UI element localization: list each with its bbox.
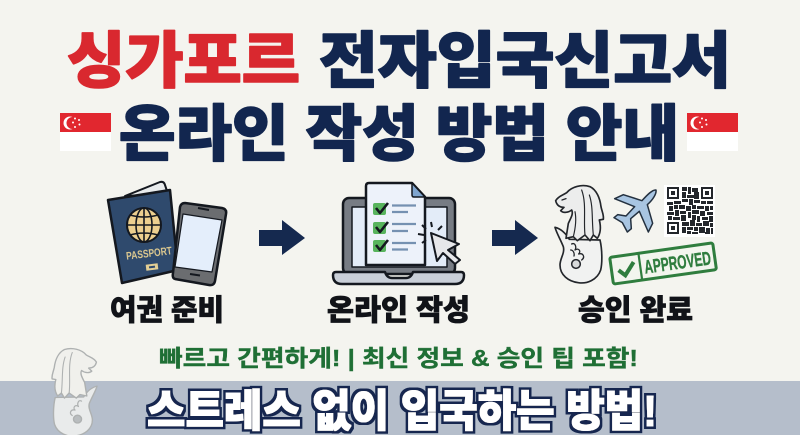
icon: laptop with checklist and cursor [333,183,464,284]
icon: passport and phone: PASSPORT [126,245,173,263]
icon: approved stamp: APPROVED [643,248,712,279]
icon: airplane [614,190,656,232]
banner text: 스트레스 없이 입국하는 방법! [147,387,657,435]
title line 1 [67,27,731,95]
icon: QR code [664,185,715,237]
step label: online: 온라인 작성 [327,294,470,327]
icon: passport and phone [108,182,226,285]
title line 1: 전자입국신고서 [319,27,731,95]
icon: faded merlion [52,349,97,435]
step label: passport: 여권 준비 [110,294,224,327]
icon: approved stamp [610,243,716,284]
arrow 2 [492,220,538,255]
arrow 1 [259,220,305,255]
icon: Singapore flag left [60,113,111,151]
icon: merlion statue [555,186,603,283]
title line 1: 싱가포르 [67,27,300,95]
banner background [0,381,800,435]
icon: Singapore flag right [687,113,738,151]
title line 2: 온라인 작성 방법 안내 [119,100,679,168]
step label: approval: 승인 완료 [578,294,693,327]
subtitle: 빠르고 간편하게! | 최신 정보 & 승인 팁 포함! [159,345,638,371]
